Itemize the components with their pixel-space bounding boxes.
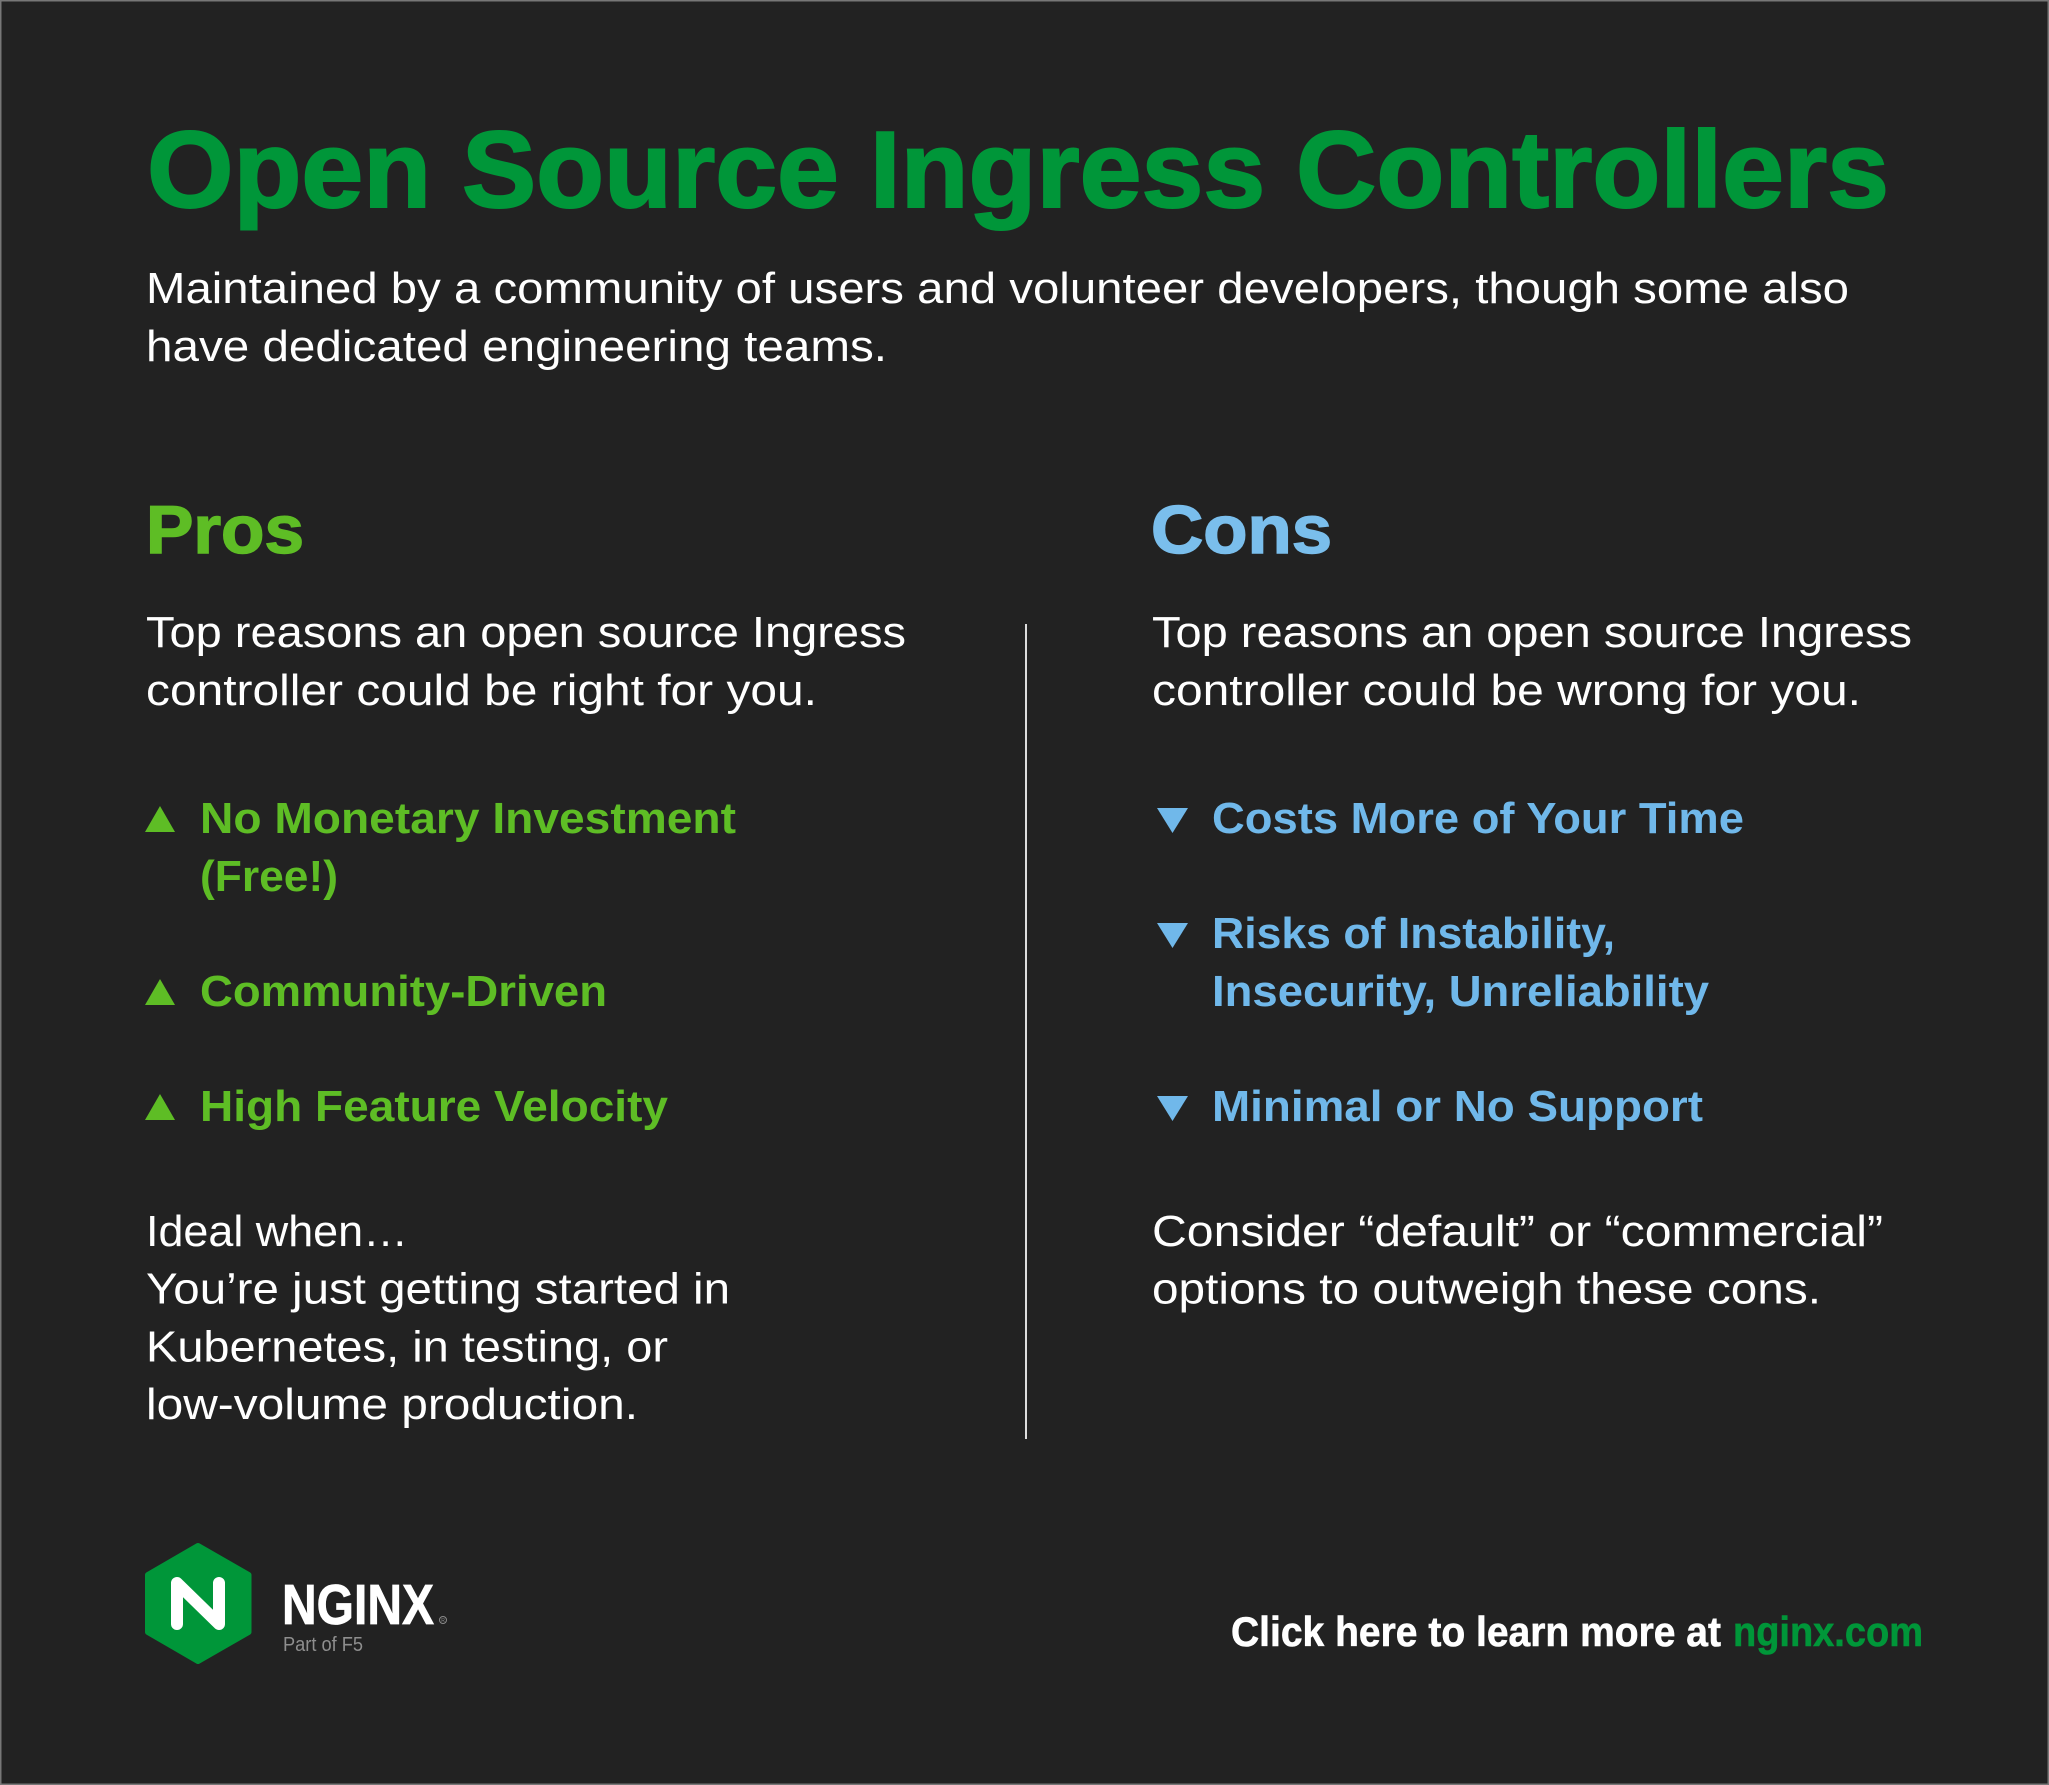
title: Open Source Ingress Controllers — [147, 109, 1889, 231]
con item: risks of instability: Insecurity, Unreliability — [1212, 968, 1709, 1016]
cons intro — [1152, 609, 1912, 715]
consider text — [1152, 1208, 1883, 1314]
pros heading: Pros — [146, 492, 304, 568]
part of f5: Part of F5 — [283, 1634, 363, 1656]
pro item: high feature velocity: High Feature Velocity — [200, 1083, 668, 1131]
registered mark — [440, 1616, 446, 1624]
ideal when text — [146, 1208, 730, 1429]
nginx logo — [148, 1546, 446, 1661]
pro item: community-driven: Community-Driven — [200, 968, 607, 1016]
consider text: options to outweigh these cons. — [1152, 1266, 1821, 1314]
ideal when text: You’re just getting started in — [146, 1266, 730, 1314]
pro item: no monetary investment — [145, 795, 736, 901]
pros intro: Top reasons an open source Ingress — [146, 609, 906, 657]
registered mark: R — [441, 1618, 445, 1624]
con item: risks of instability: Risks of Instability, — [1212, 910, 1615, 958]
pros intro — [146, 609, 906, 715]
ideal when text: low-volume production. — [146, 1381, 638, 1429]
pros intro: controller could be right for you. — [146, 667, 817, 715]
con item: minimal or no support: Minimal or No Support — [1212, 1083, 1703, 1131]
panel: cons — [1151, 492, 1912, 1314]
cons heading: Cons — [1151, 492, 1332, 568]
subtitle — [146, 265, 1849, 371]
con item: costs more of your time: Costs More of Your Time — [1212, 795, 1744, 843]
subtitle: Maintained by a community of users and volunteer developers, though some also — [146, 265, 1849, 313]
con item: risks of instability — [1157, 910, 1709, 1016]
subtitle: have dedicated engineering teams. — [146, 323, 887, 371]
icon: nginx hexagon — [148, 1546, 248, 1661]
panel: pros — [145, 492, 906, 1429]
nginx wordmark: NGINX — [282, 1573, 434, 1637]
consider text: Consider “default” or “commercial” — [1152, 1208, 1883, 1256]
pro item: no monetary investment: (Free!) — [200, 853, 338, 901]
ideal when text: Ideal when… — [146, 1208, 408, 1256]
ideal when text: Kubernetes, in testing, or — [146, 1324, 668, 1372]
call to action: Click here to learn more at — [1231, 1608, 1721, 1655]
pro item: no monetary investment: No Monetary Investment — [200, 795, 736, 843]
cons intro: Top reasons an open source Ingress — [1152, 609, 1912, 657]
cons intro: controller could be wrong for you. — [1152, 667, 1861, 715]
nginx.com link: nginx.com — [1733, 1608, 1923, 1655]
